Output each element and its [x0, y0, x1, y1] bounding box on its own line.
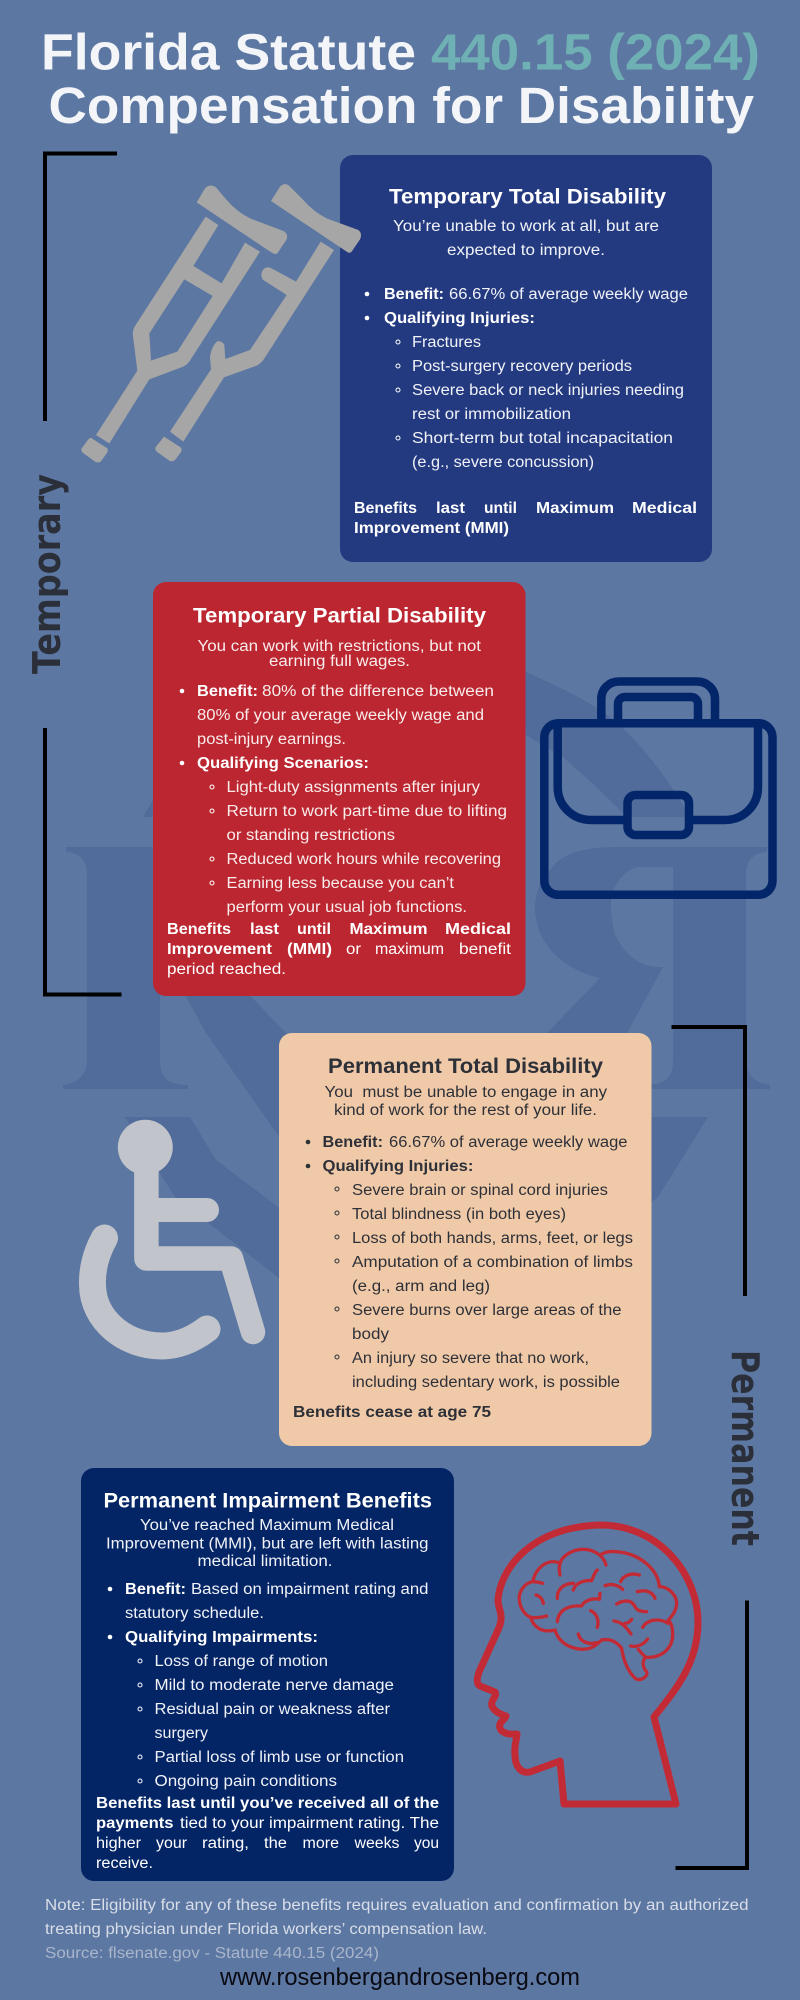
benefit list: Mild to moderate nerve damage: [154, 1677, 394, 1694]
description: earning full wages.: [269, 653, 410, 670]
benefit list: Ongoing pain conditions: [154, 1773, 337, 1790]
duration note: benefit: [459, 941, 512, 958]
benefit list: [365, 286, 688, 471]
benefit list: Short-term but total incapacitation: [412, 430, 673, 447]
benefit list: Reduced work hours while recovering: [226, 851, 501, 868]
icon: wheelchair: [92, 1120, 253, 1346]
benefit list: rest or immobilization: [412, 406, 571, 423]
duration note: Benefits last until you’ve received all of the: [96, 1795, 439, 1812]
duration note: or: [346, 941, 361, 958]
benefit list: An injury so severe that no work,: [352, 1350, 589, 1367]
icon: crutches: [81, 184, 361, 462]
duration note: Medical: [632, 500, 697, 517]
benefit list: Benefit:: [384, 286, 444, 303]
duration note: tied to your impairment rating. The: [180, 1815, 439, 1832]
benefit list: Light-duty assignments after injury: [226, 779, 480, 796]
benefit list: or standing restrictions: [226, 827, 395, 844]
benefit list: [108, 1581, 428, 1790]
watermark: R&R logo: [63, 665, 770, 1360]
benefit list: Return to work part-time due to lifting: [226, 803, 507, 820]
description: You can work with restrictions, but not: [198, 638, 482, 655]
bracket: permanent bottom: [676, 1600, 747, 1868]
note: [45, 1897, 748, 1938]
panel: temporary total disability: [340, 155, 712, 562]
duration note: your: [156, 1835, 187, 1852]
benefit list: Residual pain or weakness after: [154, 1701, 390, 1718]
benefit list: Qualifying Injuries:: [322, 1158, 474, 1175]
duration note: last: [250, 921, 279, 938]
duration note: until: [484, 500, 517, 517]
duration note: Benefits: [354, 500, 417, 517]
description: You’re unable to work at all, but are: [393, 218, 659, 235]
bracket: temporary top: [45, 154, 117, 421]
icon: head with brain: [477, 1525, 698, 1804]
duration note: Maximum: [350, 921, 428, 938]
benefit list: Post-surgery recovery periods: [412, 358, 632, 375]
description: medical limitation.: [198, 1553, 332, 1570]
duration note: Improvement (MMI): [354, 520, 509, 537]
bracket: permanent top: [672, 1027, 745, 1296]
duration note: weeks: [353, 1835, 400, 1852]
description: expected to improve.: [447, 242, 605, 259]
description: [324, 1084, 607, 1119]
benefit list: Amputation of a combination of limbs: [352, 1254, 633, 1271]
duration note: Improvement: [167, 941, 272, 958]
duration note: until: [297, 921, 331, 938]
benefit list: Qualifying Impairments:: [125, 1629, 318, 1646]
heading: Permanent Impairment Benefits: [104, 1490, 432, 1512]
benefit list: Severe brain or spinal cord injuries: [352, 1182, 608, 1199]
benefit list: Severe back or neck injuries needing: [412, 382, 684, 399]
benefit list: Loss of both hands, arms, feet, or legs: [352, 1230, 633, 1247]
benefit list: Based on impairment rating and: [191, 1581, 428, 1598]
duration note: last: [436, 500, 465, 517]
description: [393, 218, 659, 259]
benefit list: 80% of your average weekly wage and: [197, 707, 484, 724]
benefit list: statutory schedule.: [125, 1605, 264, 1622]
duration note: [167, 921, 512, 978]
note: Note: Eligibility for any of these benefits requires evaluation and confirmation by an authorized: [45, 1897, 748, 1914]
benefit list: Benefit:: [125, 1581, 186, 1598]
benefit list: Earning less because you can’t: [226, 875, 455, 892]
benefit list: Qualifying Injuries:: [384, 310, 535, 327]
duration note: Benefits cease at age 75: [293, 1404, 491, 1421]
note: treating physician under Florida workers’ compensation law.: [45, 1921, 487, 1938]
duration note: the: [264, 1835, 287, 1852]
benefit list: Qualifying Scenarios:: [197, 755, 369, 772]
duration note: more: [302, 1835, 339, 1852]
benefit list: post-injury earnings.: [197, 731, 346, 748]
side label: Permanent: Permanent: [723, 1350, 767, 1546]
benefit list: 80% of the difference between: [262, 683, 494, 700]
duration note: maximum: [375, 941, 444, 958]
duration note: [354, 500, 697, 537]
benefit list: body: [352, 1326, 389, 1343]
benefit list: Partial loss of limb use or function: [154, 1749, 404, 1766]
duration note: (MMI): [287, 941, 332, 958]
duration note: period reached.: [167, 961, 286, 978]
duration note: payments: [96, 1815, 174, 1832]
heading: Temporary Partial Disability: [193, 605, 486, 628]
website: www.rosenbergandrosenberg.com: [219, 1964, 580, 1991]
benefit list: 66.67% of average weekly wage: [389, 1134, 628, 1151]
duration note: Medical: [445, 921, 511, 938]
description: kind of work for the rest of your life.: [334, 1102, 597, 1119]
duration note: you: [414, 1835, 439, 1852]
panel: permanent total disability: [279, 1033, 652, 1446]
side label: Temporary: Temporary: [25, 474, 69, 674]
source: Source: flsenate.gov - Statute 440.15 (2024): [45, 1945, 379, 1962]
benefit list: Loss of range of motion: [154, 1653, 328, 1670]
description: [198, 638, 482, 670]
benefit list: Benefit:: [322, 1134, 383, 1151]
description: You must be unable to engage in any: [324, 1084, 607, 1101]
title: Compensation for Disability: [48, 77, 755, 134]
benefit list: [306, 1134, 633, 1391]
description: You’ve reached Maximum Medical: [140, 1517, 394, 1534]
heading: Temporary Total Disability: [389, 186, 666, 208]
panel: permanent impairment benefits: [81, 1468, 454, 1881]
bracket: temporary bottom: [45, 728, 122, 994]
benefit list: 66.67% of average weekly wage: [449, 286, 688, 303]
title: [41, 24, 760, 134]
description: Improvement (MMI), but are left with lasting: [106, 1536, 428, 1552]
benefit list: including sedentary work, is possible: [352, 1374, 620, 1391]
benefit list: Fractures: [412, 334, 481, 351]
title: Florida Statute: [41, 24, 416, 80]
duration note: higher: [96, 1835, 141, 1852]
benefit list: (e.g., arm and leg): [352, 1278, 490, 1295]
heading: Permanent Total Disability: [328, 1055, 603, 1078]
icon: briefcase: [544, 682, 772, 895]
benefit list: surgery: [154, 1725, 208, 1742]
duration note: Maximum: [536, 500, 614, 517]
benefit list: Total blindness (in both eyes): [352, 1206, 566, 1223]
duration note: [96, 1795, 439, 1872]
title: 440.15 (2024): [431, 24, 760, 80]
benefit list: Severe burns over large areas of the: [352, 1302, 622, 1319]
benefit list: Benefit:: [197, 683, 258, 700]
duration note: rating,: [202, 1835, 249, 1852]
duration note: Benefits: [167, 921, 231, 938]
benefit list: [180, 683, 507, 916]
panel: temporary partial disability: [153, 582, 526, 996]
benefit list: (e.g., severe concussion): [412, 454, 594, 471]
duration note: receive.: [96, 1855, 153, 1872]
description: [106, 1517, 428, 1570]
benefit list: perform your usual job functions.: [226, 899, 467, 916]
